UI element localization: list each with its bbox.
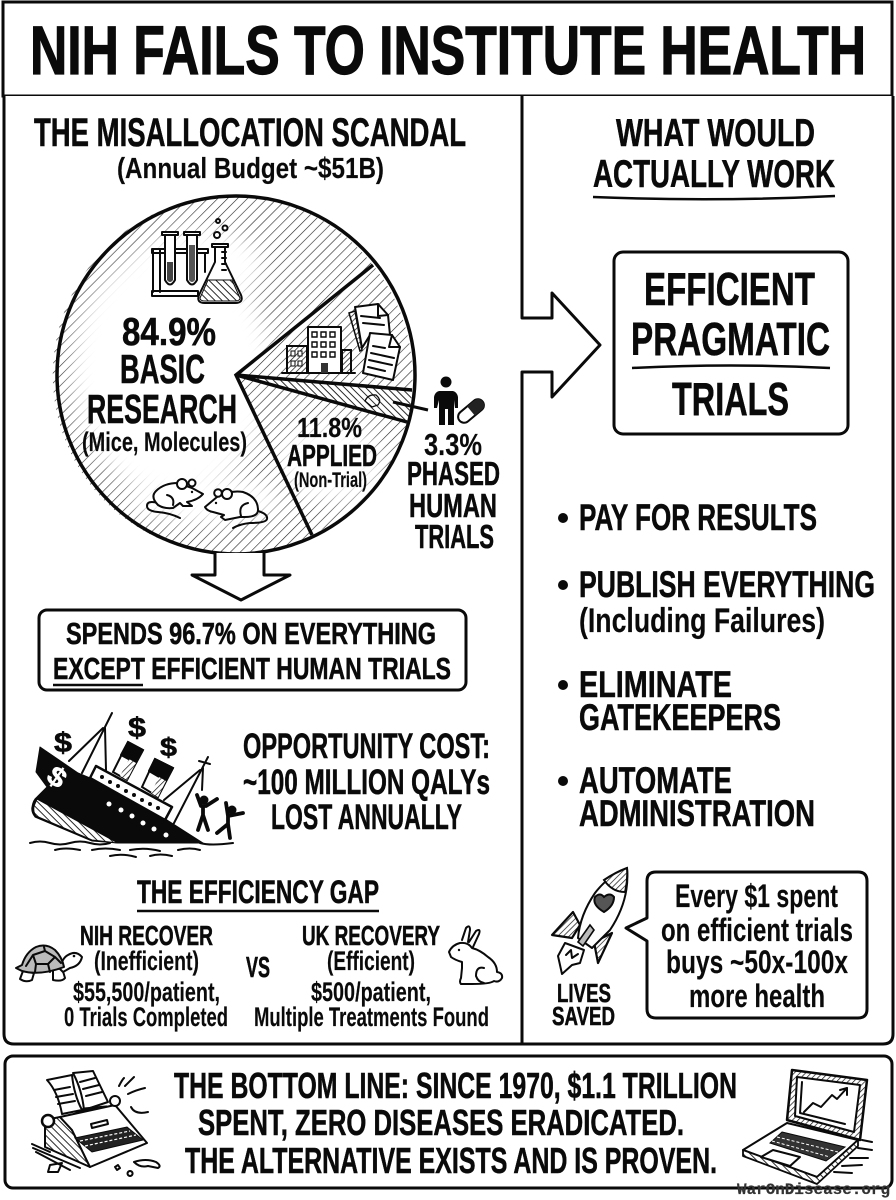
heading: the efficiency gap: THE EFFICIENCY GAP [137,874,379,910]
label: phased human trials: TRIALS [415,518,494,555]
label: phased human trials: 3.3% [424,427,482,462]
bullet: publish everything: (Including Failures) [579,602,825,640]
title banner [3,2,892,96]
icon: laptop with rising chart [743,1070,872,1184]
comparison: NIH RECOVER: (Inefficient) [94,946,199,976]
label: lives saved: SAVED [552,1001,615,1031]
label: vs: VS [246,952,270,984]
subheading: annual budget: (Annual Budget ~$51B) [117,153,384,185]
icon: rocket with heart [552,868,627,974]
panel: the misallocation scandal [16,111,502,1032]
text: bottom line statement [174,1065,737,1181]
bullet: automate administration: ADMINISTRATION [579,793,815,834]
box: efficient pragmatic trials [614,252,848,434]
icon: right mouse [205,489,267,528]
bullet: eliminate gatekeepers: ELIMINATE [579,664,732,705]
section: the efficiency gap [16,874,502,1032]
label: basic research: 84.9% [122,311,216,354]
icon: lab mice [147,479,267,528]
pie slice: applied [236,265,412,535]
icon: dollar signs: $ [41,760,72,794]
text: bottom line statement: SPENT, ZERO DISEASES ERADICATED. [198,1102,684,1143]
label: basic research [82,311,247,457]
comparison: UK RECOVERY: $500/patient, [311,977,431,1007]
label: applied non-trial: 11.8% [297,412,362,443]
icon: dollar signs: $ [128,712,146,743]
comparison: UK RECOVERY [254,920,489,1032]
label: applied non-trial [287,412,377,492]
heading: what would actually work: WHAT WOULD [616,112,815,155]
label: applied non-trial: (Non-Trial) [294,469,367,492]
box: efficient pragmatic trials: EFFICIENT [644,263,815,315]
bullet: automate administration [558,760,815,834]
comparison: UK RECOVERY: Multiple Treatments Found [254,1002,489,1032]
icon: person and pill [434,376,486,425]
watermark: WarOnDisease.org: WarOnDisease.org [737,1181,890,1199]
label: basic research: BASIC [120,346,205,392]
pie outline and slice lines [57,196,415,554]
heading: what would actually work [593,112,835,199]
pie slice: basic research [53,196,373,554]
icon: turtle [16,946,82,981]
icon: small brain in trial slice [365,395,380,407]
icon: dollar signs: $ [160,732,178,762]
icon: left mouse [147,479,203,518]
panel: what would actually work [552,112,875,1031]
bullet: eliminate gatekeepers: GATEKEEPERS [579,697,781,738]
label: applied non-trial: APPLIED [287,438,377,473]
label: phased human trials: PHASED [407,455,500,492]
callout: spends 96.7%: EXCEPT EFFICIENT HUMAN TRIALS [53,651,451,686]
main panel frame [4,96,893,1044]
text: opportunity cost: OPPORTUNITY COST: [243,727,490,766]
bullet: eliminate gatekeepers [558,664,781,738]
panel: the bottom line [5,1056,892,1188]
icon: test tubes and flask [152,219,242,303]
label: basic research: RESEARCH [87,386,237,432]
connector to trials label [393,402,428,410]
waves [30,842,233,857]
comparison: NIH RECOVER: $55,500/patient, [73,977,220,1007]
icon: paper documents [349,304,400,380]
pie chart [53,196,415,554]
comparison: NIH RECOVER: NIH RECOVER [80,920,213,951]
heading: misallocation scandal: THE MISALLOCATION SCANDAL [34,111,466,155]
label: phased human trials [407,427,500,555]
icon: rabbit [449,926,502,984]
callout: spends 96.7%: SPENDS 96.7% ON EVERYTHING [66,616,436,651]
bullet: automate administration: AUTOMATE [579,760,732,801]
icon: dollar signs: $ [54,727,72,758]
icon: people falling [197,795,243,838]
icon: typewriter [32,1071,160,1176]
callout: spends 96.7% [39,610,466,690]
pie slice: phased human trials [236,375,412,422]
list: recommendations [558,497,875,834]
icon: sinking ship with dollars [30,712,243,857]
speech bubble: every $1: Every $1 spent [675,878,838,914]
text: opportunity cost [243,727,490,837]
comparison: UK RECOVERY: (Efficient) [327,946,415,976]
label: lives saved: LIVES [557,978,611,1008]
label: lives saved [552,978,615,1031]
icon: dollar signs [41,712,178,794]
text: opportunity cost: ~100 MILLION QALYs [243,763,490,802]
arrow: down to callout [192,553,290,600]
box: efficient pragmatic trials: TRIALS [672,373,789,425]
comparison: NIH RECOVER: 0 Trials Completed [64,1002,228,1032]
speech bubble: every $1 [626,872,867,1018]
text: opportunity cost: LOST ANNUALLY [271,798,462,837]
icon: institution buildings [282,327,355,373]
speech bubble: every $1: more health [689,978,825,1014]
bullet: publish everything [558,564,875,640]
arrow: divider pointing to efficient pragmatic trials [522,96,600,1044]
label: phased human trials: HUMAN [409,487,497,524]
comparison: NIH RECOVER [64,920,228,1032]
comparison: UK RECOVERY: UK RECOVERY [302,920,440,951]
label: basic research: (Mice, Molecules) [82,427,247,457]
